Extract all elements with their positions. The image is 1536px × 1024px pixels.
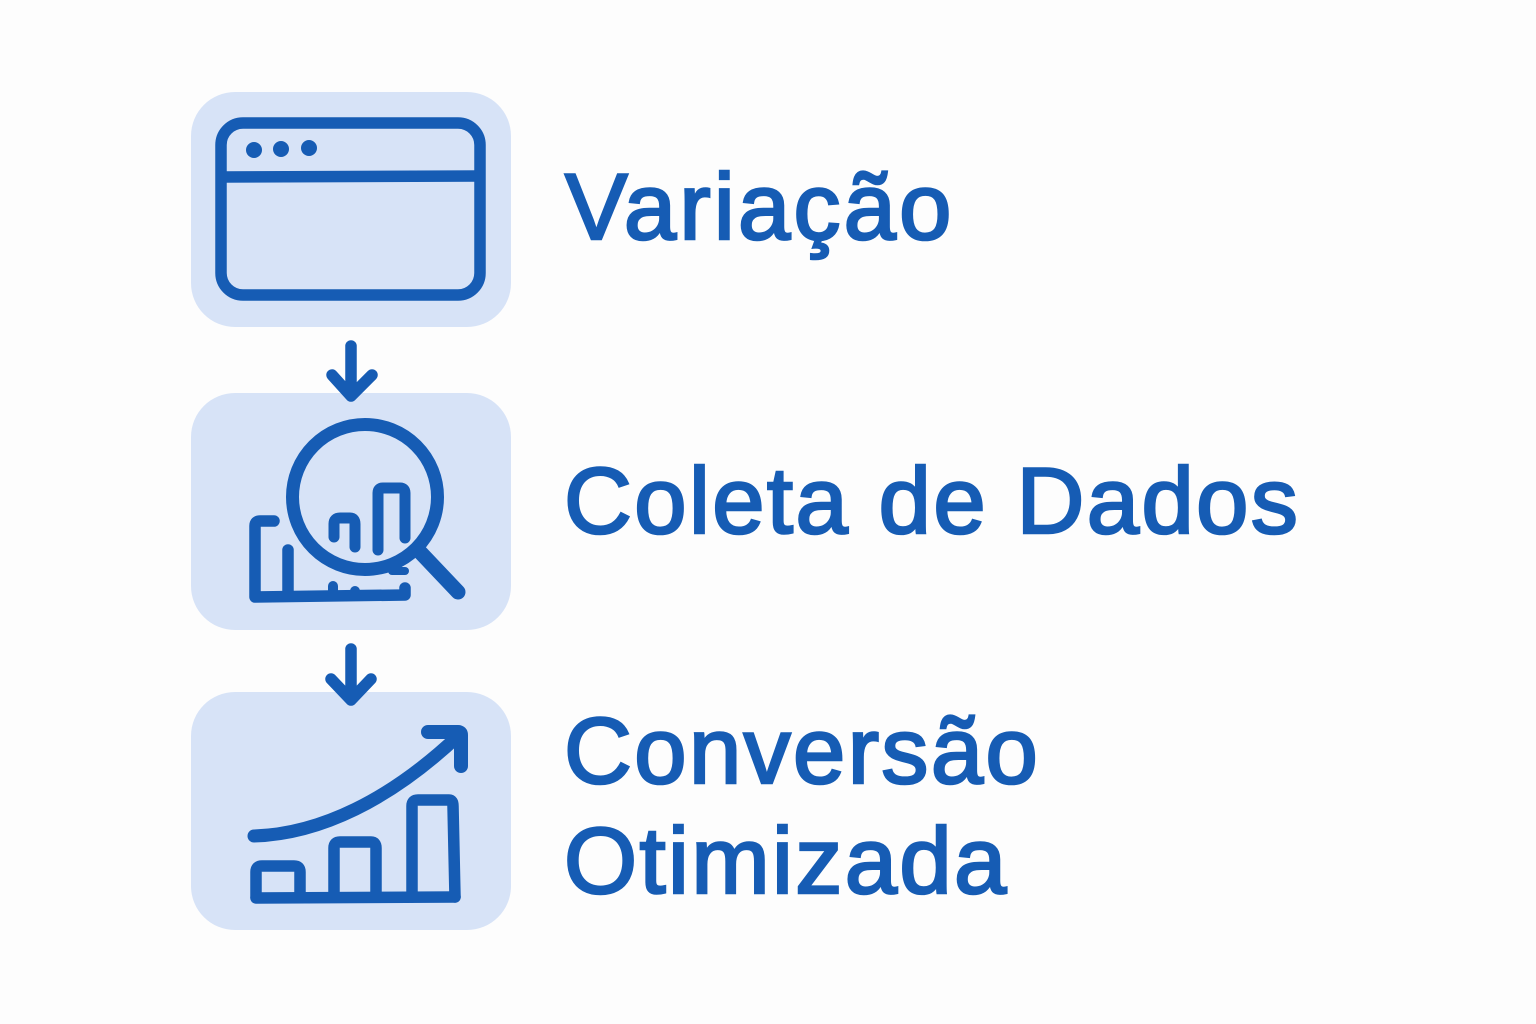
arrow: variation to data collection	[332, 346, 372, 396]
heading: Conversão Otimizada: Otimizada	[564, 808, 1009, 913]
panel: growth chart icon tile	[191, 692, 511, 930]
panel: magnifier over bar chart icon tile	[191, 393, 511, 630]
arrow: data collection to conversion	[331, 649, 371, 700]
heading: Variação: Variação	[565, 154, 955, 259]
panel: browser window icon tile	[191, 92, 511, 327]
heading: Coleta de Dados: Coleta de Dados	[564, 448, 1300, 553]
heading: Conversão Otimizada: Conversão	[564, 698, 1040, 803]
heading: Conversão Otimizada	[564, 698, 1040, 913]
